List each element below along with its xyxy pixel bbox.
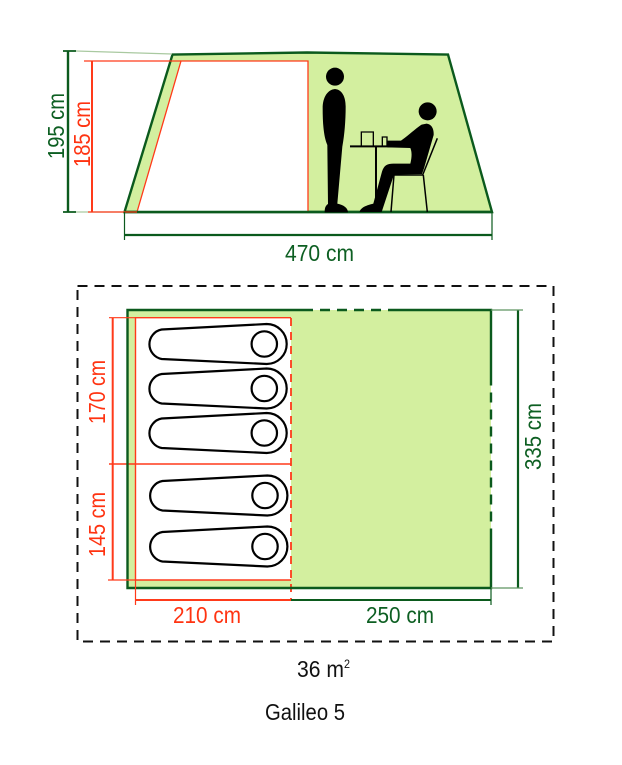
icon: seated person at table — [350, 102, 437, 212]
dimension: 470 cm width: 470 cm — [285, 240, 354, 266]
dimension: 335 cm: 335 cm — [520, 403, 546, 470]
floor line — [124, 211, 492, 213]
sleeping room — [136, 318, 291, 580]
dimension: 250 cm: 250 cm — [366, 602, 434, 628]
dimension: 210 cm: 210 cm — [173, 602, 241, 628]
bag 3 — [149, 413, 287, 453]
walls — [128, 310, 491, 588]
dimension: 195 cm height: 195 cm — [43, 93, 69, 159]
floor plan — [109, 310, 491, 600]
area label: 2 — [344, 657, 350, 671]
inner room — [137, 61, 308, 212]
side view tent — [124, 52, 492, 212]
person — [419, 102, 437, 120]
bag 2 — [149, 368, 287, 408]
chair — [391, 138, 437, 212]
dimension: 335 cm — [491, 310, 546, 588]
icon: standing person — [323, 68, 348, 212]
sleeping bags — [149, 324, 287, 566]
bag 4 — [150, 476, 287, 516]
dimension: 170 cm: 170 cm — [84, 360, 110, 424]
tent shell — [124, 52, 492, 212]
bag 1 — [149, 324, 287, 364]
dimension: 185 cm height: 185 cm — [69, 101, 95, 167]
dimension: 185 cm height — [69, 61, 181, 212]
bag 5 — [150, 526, 287, 566]
product name: Galileo 5 — [265, 699, 345, 725]
dimension: 145 cm: 145 cm — [84, 492, 110, 557]
cups — [361, 132, 387, 146]
floor plan outer dashed boundary — [78, 286, 554, 642]
table — [350, 146, 407, 205]
dimension: 195 cm height — [43, 51, 172, 212]
dimension: 145 cm — [84, 464, 136, 580]
area label: 36 m — [297, 656, 349, 682]
dimension: 470 cm width — [124, 212, 492, 266]
living area fill — [128, 310, 491, 588]
